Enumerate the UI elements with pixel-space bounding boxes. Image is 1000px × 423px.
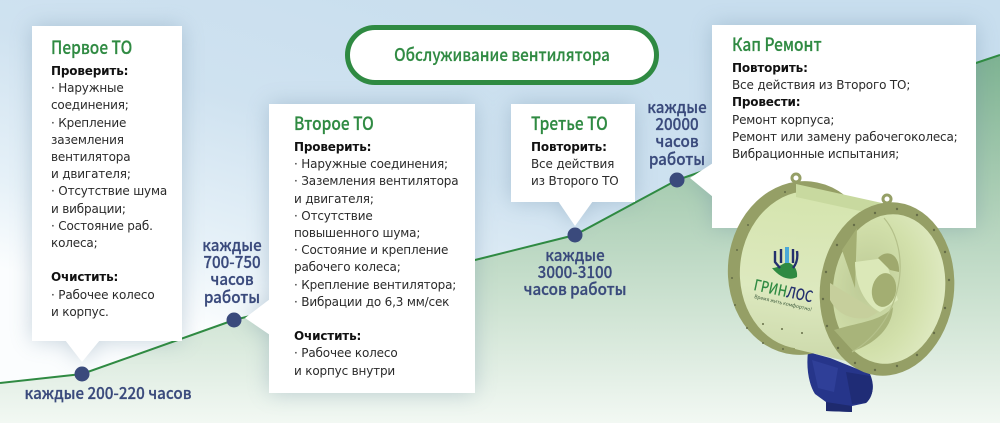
logo	[752, 247, 815, 313]
logo: ГРИНЛОС	[752, 273, 815, 307]
text: second maintenance: Проверить: · Наружные соединения; · Заземления вентилятора и двигателя; · Отсутствие повышенного шума; · Состояние и крепление рабочего колеса; · Крепление вентилятора; · Вибрации до 6,3 мм/сек Очистить: · Рабочее колесо и корпус внутри	[294, 140, 458, 378]
heading: third maintenance: Третье ТО	[531, 110, 608, 136]
front flange	[810, 194, 964, 384]
panel: first maintenance	[32, 26, 182, 341]
motor	[807, 352, 873, 412]
title: Обслуживание вентилятора	[394, 42, 610, 67]
heading: first maintenance: Первое ТО	[51, 34, 132, 60]
fan interior	[824, 208, 954, 370]
text: first maintenance: Проверить: · Наружные соединения; · Крепление заземления вентилятора и двигателя; · Отсутствие шума и вибрации; · Состояние раб. колеса; Очистить: · Рабочее колесо и корпус.	[51, 64, 167, 319]
heading: second maintenance: Второе ТО	[294, 110, 374, 136]
body shell	[732, 185, 890, 362]
label: 3000-3100 hours: каждые 3000-3100 часов работы	[523, 242, 626, 300]
heading: capital repair: Кап Ремонт	[732, 31, 822, 57]
panel: second maintenance	[269, 104, 475, 393]
fan blades and hub	[830, 218, 900, 352]
title	[345, 25, 659, 85]
panel: third maintenance	[511, 104, 635, 202]
label: 700-750 hours: каждые 700-750 часов работы	[202, 232, 262, 308]
rear flange	[719, 174, 885, 362]
text: capital repair: Повторить: Все действия из Второго ТО; Провести: Ремонт корпуса; Ремонт или замену рабочегоколеса; Вибрационные испытания;	[732, 61, 958, 161]
text: third maintenance: Повторить: Все действия из Второго ТО	[531, 140, 619, 188]
label: 200-220 hours: каждые 200-220 часов	[25, 380, 191, 404]
label: 20000 hours: каждые 20000 часов работы	[647, 94, 707, 170]
logo: Время жить комфортно!	[754, 293, 813, 313]
panel: capital repair	[712, 25, 976, 228]
flange bolts	[731, 191, 950, 371]
lifting lugs	[792, 174, 891, 203]
